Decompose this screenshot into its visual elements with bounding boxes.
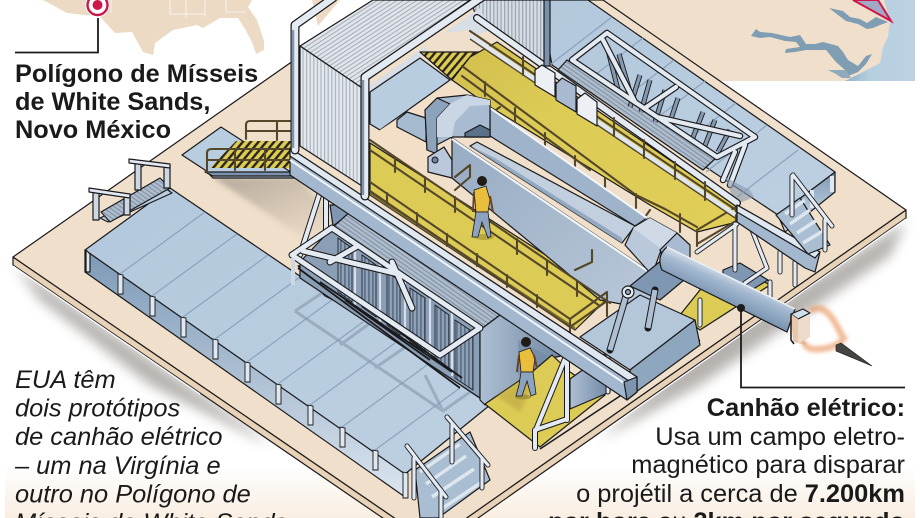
person: upper walkway: [472, 176, 494, 240]
projectile: [836, 343, 872, 366]
building interior: back wall and floors: [369, 0, 737, 330]
room floor: [485, 355, 605, 447]
front walkway yellow: [370, 143, 610, 330]
background band behind bottom captions: [5, 465, 915, 518]
text: Novo México: [15, 116, 171, 144]
yellow grating: [420, 52, 492, 80]
corrugated roof: [333, 210, 500, 330]
lower truss black bracing: [298, 263, 462, 388]
back post: [544, 0, 550, 66]
back walkway yellow: [452, 42, 737, 232]
right deck truss: [558, 33, 755, 205]
text: electric gun description: magnético para disparar: [631, 451, 906, 479]
person: lower level: [515, 337, 537, 400]
text: prototypes note: de canhão elétrico: [15, 423, 223, 451]
platform shadow: [15, 222, 906, 445]
muzzle: [791, 309, 810, 345]
corrugated wall: [300, 46, 362, 186]
building roof and wall: [293, 0, 550, 196]
deck end supports: [792, 176, 832, 222]
yellow walkway edge shade: [370, 191, 575, 330]
text: de White Sands,: [15, 88, 210, 116]
gun base: [580, 255, 700, 395]
far right substructure: [680, 224, 795, 330]
truss shadow on deck: [295, 281, 490, 411]
deck edge posts: [118, 274, 408, 498]
right deck: [540, 0, 835, 232]
gun cone body: [470, 142, 635, 243]
deck plank lines: [120, 212, 460, 450]
text: electric gun description: [548, 394, 906, 518]
shed wall panels: [300, 228, 480, 398]
muzzle blast glow: [803, 308, 844, 349]
lug ring: [428, 147, 452, 178]
text: electric gun description: o projétil a cerca de 7.200km: [576, 480, 905, 508]
leader line: White Sands: [15, 18, 98, 52]
lower truss frame: [292, 228, 480, 355]
blue plate: [370, 58, 450, 130]
text: electric gun description: Usa um campo eletro-: [655, 423, 905, 451]
vertical truss bars: [608, 50, 730, 152]
front main beam: [290, 148, 637, 400]
corrugated back wall: [470, 0, 545, 62]
back beam steel rail: [470, 18, 737, 218]
title: White Sands: Polígono de Mísseis: [15, 60, 258, 88]
map: southern United States: [43, 0, 340, 55]
gun housing: [625, 218, 690, 275]
back wall of gun mount: [490, 108, 647, 226]
front posts and frame: [295, 0, 482, 196]
corrugated walkway: [558, 60, 717, 170]
landing with yellow grating: [182, 121, 340, 235]
leader line: electric gun: [737, 304, 905, 388]
interior steel under-roof band: [369, 8, 490, 92]
yellow floor fragment: [298, 265, 333, 300]
icon: location pin on map: [86, 0, 110, 17]
left deck: [85, 188, 490, 498]
stairs: far left: [89, 159, 172, 222]
floor supports: [535, 354, 567, 448]
text: prototypes note: outro no Polígono de: [15, 480, 251, 508]
text: electric gun description: Canhão elétrico:: [707, 394, 905, 422]
landing shadow: [212, 177, 340, 235]
room walls: [480, 315, 565, 405]
supports: [300, 186, 326, 255]
truss frame tubes: [572, 33, 755, 185]
right deck plank lines: [551, 17, 798, 197]
text: prototypes note: dois protótipos: [15, 394, 180, 422]
map: Virginia coast: [600, 0, 915, 81]
stairs: right deck: [776, 175, 832, 254]
corrugated roof: [300, 0, 470, 88]
landing rails: [207, 121, 292, 172]
right main beam: [737, 205, 820, 272]
front walkway rails: [370, 140, 610, 338]
gun barrel: [660, 247, 795, 332]
lower shed: [292, 186, 700, 449]
wedge block: [397, 112, 426, 142]
text: prototypes note: EUA têm: [15, 366, 116, 394]
right panel: [570, 350, 610, 409]
front wall of gun mount: [452, 138, 652, 310]
breech block: [425, 95, 490, 178]
floor tan under gun: [370, 84, 470, 178]
stairs: left deck: [407, 417, 490, 518]
truss shadow: [725, 177, 754, 205]
hydraulic struts: [610, 290, 655, 350]
back walkway rails: [462, 66, 736, 246]
electrical boxes: [535, 65, 597, 126]
text: prototypes note: – um na Virgínia e: [14, 452, 221, 480]
